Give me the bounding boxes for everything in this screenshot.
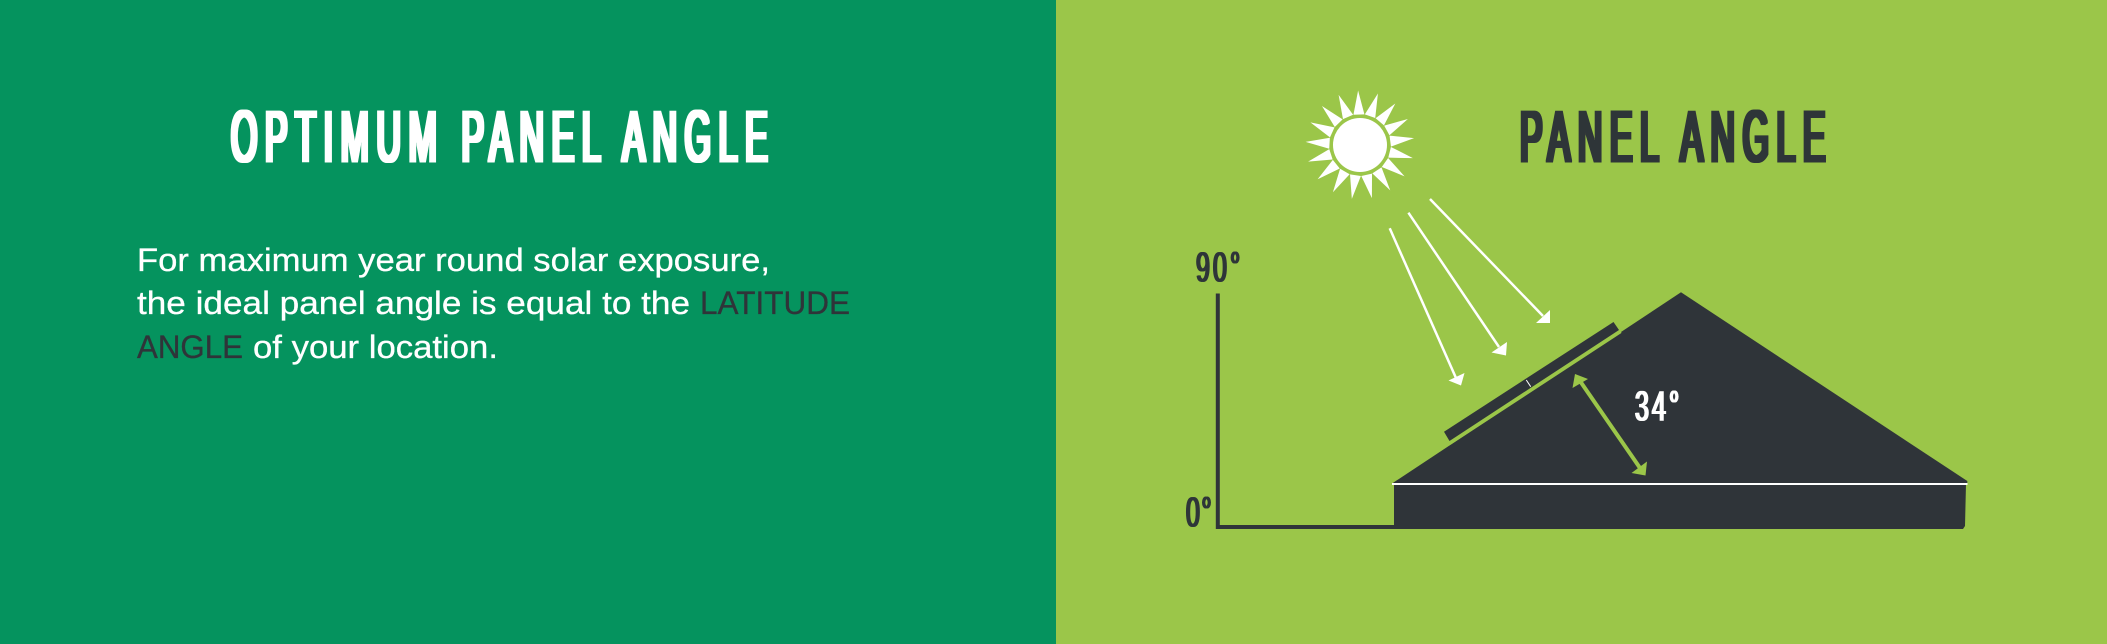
heading: panel angle: PANEL ANGLE: [1520, 96, 1826, 177]
text block: explanation: ANGLE: [137, 329, 243, 365]
label: 34 degrees: 34°: [1635, 383, 1679, 430]
building: roof and wall: [1392, 292, 1968, 529]
text block: explanation: LATITUDE: [700, 285, 850, 321]
icon: sun: [1305, 90, 1415, 200]
text block: explanation: [137, 242, 850, 365]
heading: optimum panel angle: OPTIMUM PANEL ANGLE: [231, 96, 768, 177]
arrow: sun ray right: [1430, 199, 1550, 323]
arrow: sun ray left: [1390, 228, 1464, 386]
text block: explanation: For maximum year round solar exposure,: [137, 242, 770, 278]
label: 90 degrees: 90°: [1196, 244, 1240, 291]
panel: left green background: [0, 0, 1056, 644]
text block: explanation: of your location.: [253, 329, 498, 365]
panel: right lime background: [1056, 0, 2107, 644]
solar panel: [1444, 322, 1621, 444]
text block: explanation: the ideal panel angle is equal to the: [137, 285, 690, 321]
arrow: green double arrow: [1572, 374, 1647, 476]
chart axis: vertical and horizontal: [1218, 294, 1400, 527]
label: 0 degrees: 0°: [1186, 489, 1212, 536]
arrow: sun ray middle: [1408, 213, 1507, 356]
